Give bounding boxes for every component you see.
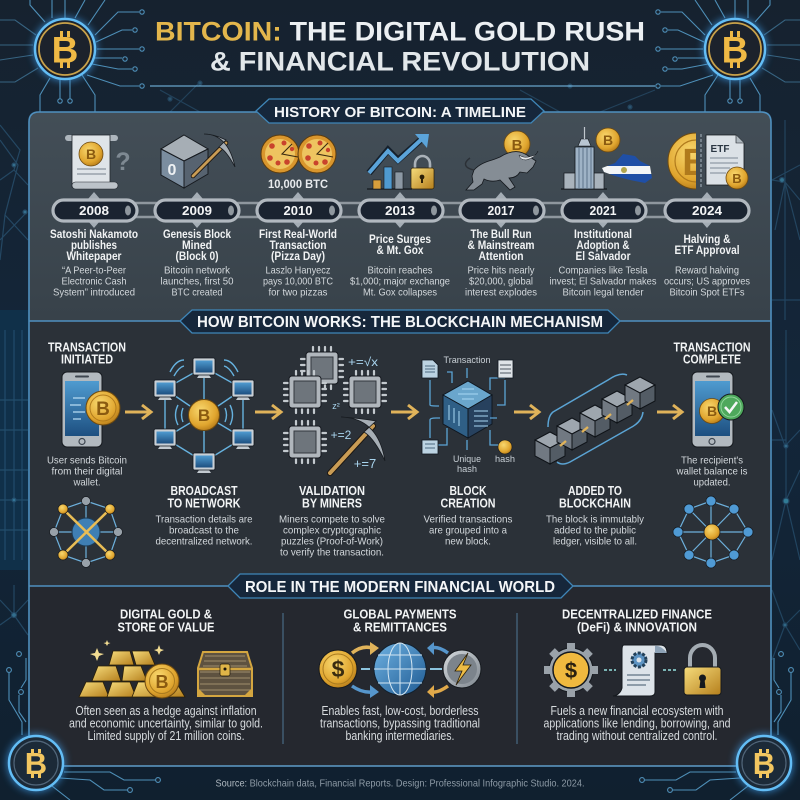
background circuitry: right side [772, 120, 800, 660]
timeline entry 2008: Whitepaper [66, 251, 122, 263]
icon: mining chips and pickaxe: +=2 [331, 428, 352, 442]
chain connectors [130, 203, 671, 217]
icon: computer network with coin: B [198, 406, 210, 425]
icon: crossed node network [50, 496, 122, 568]
panel: digital gold: Limited supply of 21 million coins. [88, 729, 244, 743]
panel: global payments: GLOBAL PAYMENTS [344, 606, 457, 621]
section background: role [29, 586, 771, 766]
timeline entry 2013: $1,000; major exchange [350, 276, 450, 288]
panel outline [29, 112, 771, 766]
year 2021: 2021 [590, 204, 617, 218]
panel: global payments [319, 606, 481, 743]
timeline entry 2013: Bitcoin reaches [368, 264, 432, 276]
step: broadcast to network: broadcast to the [169, 525, 239, 537]
timeline entry 2008: publishes [71, 240, 117, 252]
timeline entry 2008: System” introduced [53, 286, 135, 298]
icon: halved coin and ETF document [668, 133, 748, 189]
corner circuit: top left [0, 0, 144, 112]
background circuitry: title band [160, 81, 655, 112]
year 2021 [562, 200, 646, 221]
timeline chain [53, 192, 749, 228]
step: validation by miners: complex cryptographic [283, 525, 381, 537]
icon: mining chips and pickaxe: z² [332, 401, 340, 411]
timeline entry 2021: Institutional [574, 229, 632, 241]
heading: how bitcoin works [29, 310, 771, 333]
icon: globe [374, 643, 426, 695]
timeline entry 2024: occurs; US approves [664, 276, 750, 288]
panel: decentralized finance: (DeFi) & INNOVATION [577, 620, 697, 635]
step: transaction initiated: wallet. [73, 477, 100, 489]
step: block creation [422, 355, 515, 548]
icon: mining chips and pickaxe: +=7 [354, 456, 376, 471]
background: left strip tint [0, 310, 29, 570]
step: transaction initiated: TRANSACTION [48, 340, 126, 354]
step: block creation: BLOCK [450, 483, 487, 498]
arrow: initiated to broadcast [125, 405, 151, 419]
timeline entry 2024: Bitcoin Spot ETFs [670, 286, 744, 298]
icon: phone with check [692, 372, 744, 447]
step: validation by miners [279, 347, 386, 559]
timeline entry 2010: Transaction [270, 240, 326, 252]
timeline entry 2008 [50, 229, 138, 298]
icon: computer network with coin [154, 358, 254, 473]
step: transaction complete: updated. [694, 477, 730, 489]
timeline entry 2024: Halving & [684, 234, 730, 246]
timeline entry 2008: Satoshi Nakamoto [50, 229, 138, 241]
icon: data cube with inputs [422, 355, 515, 475]
icon: genesis block and pickaxe: 0 [168, 162, 177, 179]
title [155, 16, 645, 76]
icon: corner coin bottom right: B [753, 746, 775, 781]
section background: timeline [29, 112, 771, 321]
step: transaction initiated: from their digital [52, 466, 122, 478]
icon: data cube with inputs: Transaction [444, 355, 490, 366]
timeline entry 2021: Adoption & [576, 240, 630, 252]
timeline entry 2009: launches, first 50 [160, 276, 234, 288]
timeline entry 2013: Price Surges [369, 234, 431, 246]
step: added to blockchain: The block is immutably [546, 514, 645, 526]
timeline entry 2009 [160, 229, 234, 298]
icon: lightning coin [443, 650, 481, 688]
step: block creation: are grouped into a [429, 525, 507, 537]
year 2024: 2024 [692, 204, 722, 218]
icon: whitepaper scroll [65, 135, 131, 189]
timeline entry 2013 [350, 234, 450, 298]
step: added to blockchain: ADDED TO [568, 483, 622, 498]
icon: dollar coin: $ [332, 656, 345, 682]
step: transaction complete: COMPLETE [683, 352, 741, 367]
icon: phone with coin [62, 372, 120, 447]
icon: institutional building: B [603, 132, 613, 148]
year 2009 [155, 200, 239, 221]
panel: history of bitcoin timeline [29, 112, 771, 766]
panel: digital gold: STORE OF VALUE [118, 620, 215, 635]
icon: two pizzas [261, 135, 336, 191]
connector dots right [663, 669, 676, 671]
timeline entry 2017: interest explodes [465, 286, 537, 298]
step: block creation: Verified transactions [424, 514, 512, 526]
timeline entry 2013: Mt. Gox collapses [363, 286, 437, 298]
step: transaction complete [674, 340, 750, 489]
timeline entry 2013: & Mt. Gox [376, 245, 424, 257]
heading: history of bitcoin [256, 99, 544, 123]
corner circuit: top right [656, 0, 800, 112]
timeline entry 2021: Companies like Tesla [558, 264, 648, 276]
panel: global payments: & REMITTANCES [353, 620, 447, 635]
column divider right [516, 613, 518, 744]
year 2009: 2009 [182, 204, 212, 218]
panel: decentralized finance [544, 606, 731, 743]
arrow: broadcast to validation [255, 405, 281, 419]
title: BITCOIN: THE DIGITAL GOLD RUSH [155, 16, 645, 46]
panel: global payments: transactions, bypassing traditional [320, 716, 480, 730]
corner circuit: bottom left [7, 652, 160, 800]
connector dots left [604, 669, 616, 671]
icon: gold bars and coin: B [156, 672, 168, 692]
icon: phone with check: B [707, 403, 717, 419]
corner circuit: bottom right [640, 652, 793, 800]
background circuitry: left side [0, 125, 28, 635]
arrows: payment flows [352, 642, 448, 698]
step: broadcast to network: BROADCAST [170, 483, 238, 498]
timeline entry 2008: “A Peer-to-Peer [62, 264, 126, 276]
step: validation by miners: VALIDATION [299, 483, 365, 498]
icon: chain of cubes [535, 374, 655, 464]
panel: global payments: Enables fast, low-cost, borderless [322, 704, 478, 718]
icon: price surge chart and padlock [367, 134, 434, 189]
timeline entry 2017: The Bull Run [470, 229, 532, 241]
year 2013: 2013 [385, 204, 415, 218]
timeline entry 2024: Reward halving [675, 264, 739, 276]
timeline entry 2017: $20,000, global [469, 276, 533, 288]
icon: halved coin and ETF document: B [732, 171, 742, 186]
year 2017: 2017 [488, 204, 515, 218]
heading: role in the modern financial world [29, 574, 771, 598]
heading: role in the modern financial world: ROLE IN THE MODERN FINANCIAL WORLD [245, 579, 555, 596]
icon: smart contract scroll [613, 645, 667, 696]
timeline entry 2009: Bitcoin network [164, 264, 231, 276]
icon: mining chips and pickaxe: +=√x [348, 355, 378, 369]
year 2008: 2008 [79, 204, 109, 218]
timeline entry 2017: Price hits nearly [468, 264, 535, 276]
step: added to blockchain: BLOCKCHAIN [559, 495, 631, 510]
timeline entry 2017: & Mainstream [468, 240, 534, 252]
step: added to blockchain [535, 374, 655, 548]
icon: genesis block and pickaxe [161, 134, 235, 188]
panel: digital gold: and economic uncertainty, similar to gold. [69, 716, 263, 730]
icon: corner coin bottom left [7, 734, 65, 792]
timeline entry 2010: Laszlo Hanyecz [266, 264, 330, 276]
panel: global payments: banking intermediaries. [346, 729, 454, 743]
icon: gold padlock [684, 645, 721, 695]
panel: decentralized finance: applications like lending, borrowing, and [544, 716, 731, 730]
icon: data cube with inputs: Unique [453, 454, 481, 465]
icon: treasure chest [198, 652, 252, 696]
year 2013 [359, 200, 443, 221]
panel: digital gold: Often seen as a hedge against inflation [76, 704, 257, 718]
step: transaction initiated: User sends Bitcoin [47, 455, 127, 467]
icon: corner coin top right: B [722, 30, 748, 70]
step: block creation: CREATION [440, 495, 496, 510]
icon: gear with dollar: $ [565, 658, 577, 683]
year 2010 [257, 200, 341, 221]
step: validation by miners: to verify the transaction. [280, 547, 384, 559]
icon: institutional building [561, 127, 620, 189]
icon: corner coin top left: B [52, 30, 78, 70]
icon: phone with coin: B [96, 399, 110, 420]
chain diamonds [88, 192, 713, 228]
step: transaction complete: TRANSACTION [674, 340, 750, 354]
icon: dollar coin [319, 650, 357, 688]
icon: corner coin top right [703, 17, 767, 81]
icon: hub node network [673, 496, 753, 568]
step: validation by miners: puzzles (Proof-of-Work) [281, 536, 383, 548]
step: broadcast to network: Transaction details are [156, 514, 253, 526]
timeline entry 2021: El Salvador [576, 251, 631, 263]
panel: decentralized finance: DECENTRALIZED FINANCE [562, 606, 712, 621]
panel: digital gold: DIGITAL GOLD & [120, 606, 212, 621]
title rule [150, 84, 655, 88]
icon: data cube with inputs: hash [457, 464, 477, 475]
timeline entry 2010: (Pizza Day) [271, 251, 325, 263]
arrow: block creation to blockchain [514, 405, 539, 419]
icon: whitepaper scroll: B [86, 146, 96, 162]
step: block creation: new block. [445, 536, 491, 548]
timeline entry 2024 [664, 234, 750, 298]
step: broadcast to network: TO NETWORK [168, 495, 241, 510]
step: transaction complete: wallet balance is [676, 466, 748, 478]
source line: Source: Blockchain data, Financial Reports. Design: Professional Infographic Studio. 2024. [216, 778, 584, 790]
arrow: validation to block creation [391, 405, 417, 419]
column divider left [282, 613, 284, 744]
timeline entry 2010: for two pizzas [268, 286, 328, 298]
step: transaction complete: The recipient's [681, 455, 743, 467]
icon: corner coin bottom left: B [25, 746, 47, 781]
icon: whitepaper scroll: ? [115, 148, 131, 176]
arrow: blockchain to complete [657, 405, 682, 419]
bottom panel edge [29, 764, 771, 768]
panel: decentralized finance: Fuels a new financial ecosystem with [550, 704, 724, 718]
timeline entry 2009: Genesis Block [163, 229, 232, 241]
icon: data cube with inputs: hash [495, 454, 515, 465]
timeline entry 2021 [550, 229, 656, 298]
icon: gold bars and coin [79, 640, 185, 698]
step: broadcast to network [154, 358, 254, 548]
icon: mining chips and pickaxe [284, 347, 386, 473]
icon: halved coin and ETF document: ETF [711, 144, 729, 155]
icon: halved coin and ETF document: B [682, 142, 710, 184]
panel: digital gold [69, 606, 263, 743]
timeline entry 2009: (Block 0) [176, 251, 219, 263]
timeline entry 2010 [259, 229, 337, 298]
icon: corner coin top left [33, 17, 97, 81]
icon: bull with coin [465, 131, 538, 190]
year 2010: 2010 [284, 204, 313, 218]
step: added to blockchain: added to the public [554, 525, 636, 537]
year 2008 [53, 200, 137, 221]
timeline entry 2024: ETF Approval [674, 245, 740, 257]
step: transaction initiated [47, 340, 127, 489]
timeline entry 2021: Bitcoin legal tender [562, 286, 644, 298]
year 2017 [460, 200, 544, 221]
timeline entry 2009: Mined [182, 240, 212, 252]
step: broadcast to network: decentralized network. [156, 536, 252, 548]
heading: history of bitcoin: HISTORY OF BITCOIN: A TIMELINE [274, 104, 526, 121]
timeline entry 2017: Attention [478, 251, 524, 263]
timeline entry 2008: Electronic Cash [62, 276, 127, 288]
timeline entry 2009: BTC created [172, 286, 223, 298]
icon: bull with coin: B [512, 137, 523, 154]
section background: mechanism [29, 321, 771, 586]
step: validation by miners: BY MINERS [302, 495, 362, 510]
step: transaction initiated: INITIATED [61, 352, 113, 367]
timeline entry 2017 [465, 229, 537, 298]
timeline entry 2010: pays 10,000 BTC [263, 276, 333, 288]
timeline entry 2021: invest; El Salvador makes [550, 276, 656, 288]
title: & FINANCIAL REVOLUTION [210, 46, 590, 76]
step: added to blockchain: ledger, visible to all. [553, 536, 637, 548]
icon: corner coin bottom right [735, 734, 793, 792]
year 2024 [665, 200, 749, 221]
icon: gear with dollar [544, 643, 598, 697]
heading: how bitcoin works: HOW BITCOIN WORKS: THE BLOCKCHAIN MECHANISM [197, 314, 603, 331]
panel: decentralized finance: trading without centralized control. [556, 729, 718, 743]
icon: two pizzas: 10,000 BTC [268, 179, 328, 191]
timeline entry 2010: First Real-World [259, 229, 337, 241]
step: validation by miners: Miners compete to solve [279, 514, 385, 526]
icon: el salvador flag map [602, 154, 652, 183]
